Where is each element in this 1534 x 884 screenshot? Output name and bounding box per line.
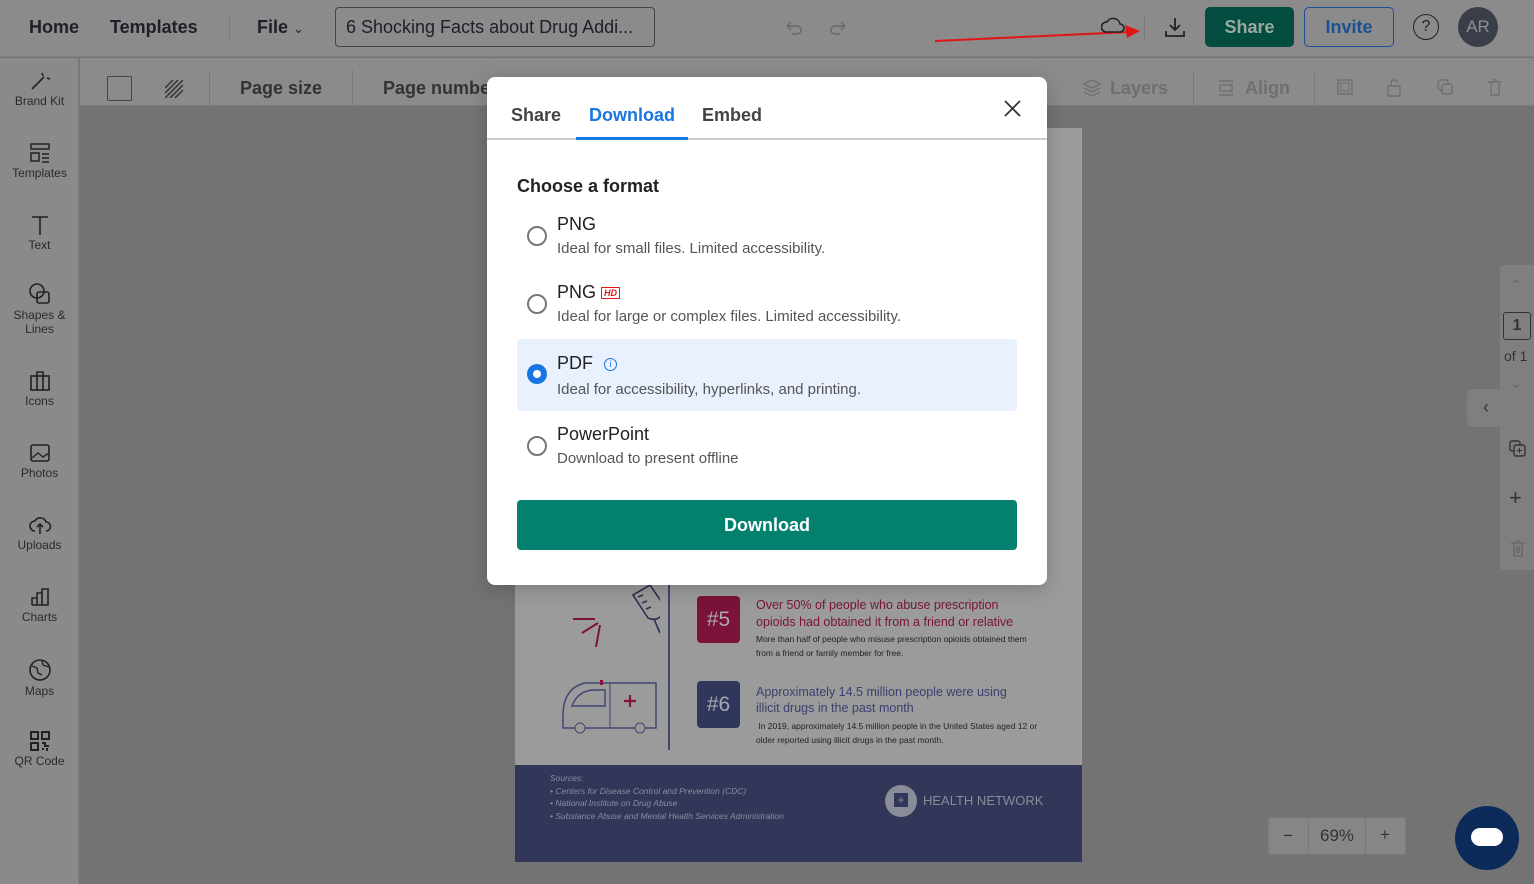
tabs: Embed: [702, 105, 762, 125]
share button: Share: [1224, 17, 1275, 37]
top bar: [0, 0, 1534, 57]
right page panel: of 1: [1504, 348, 1527, 364]
chat bubble: [1455, 806, 1519, 870]
toolbar: Layers: [1110, 78, 1168, 98]
collapse tab: ‹: [1483, 397, 1489, 417]
option: PowerPoint: Download to present offline: [557, 450, 739, 467]
fact #5: More than half of people who misuse prescription opioids obtained them from a friend or family member for free.: [756, 634, 1027, 658]
tabs: Share: [511, 105, 561, 125]
fact #5: #5: [707, 608, 730, 631]
toolbar: Align: [1245, 78, 1290, 98]
tabs: Download: [589, 105, 675, 125]
logo: health network: +: [897, 793, 904, 807]
fact #6: [697, 681, 1038, 745]
left sidebar: Charts: [22, 610, 57, 624]
option: PNG: [527, 214, 825, 257]
footer: sources: [515, 765, 1082, 862]
left sidebar: Templates: [12, 166, 67, 180]
option: PDF selected: Ideal for accessibility, hyperlinks, and printing.: [557, 381, 861, 398]
left sidebar: Icons: [25, 394, 54, 408]
left sidebar: QR Code: [14, 754, 65, 768]
invite button: Invite: [1325, 17, 1372, 37]
logo: health network: HEALTH NETWORK: [923, 793, 1043, 808]
right page panel: ⌃: [1510, 277, 1522, 293]
zoom control: [1268, 817, 1406, 855]
nav: Home: Home: [29, 17, 79, 37]
option: PNG HD: Ideal for large or complex files. Limited accessibility.: [557, 308, 901, 325]
timeline line: [668, 578, 670, 750]
fact #6: #6: [707, 693, 730, 716]
fact #5: Over 50% of people who abuse prescription opioids had obtained it from a friend or relative: [756, 598, 1013, 629]
option: PNG: Ideal for small files. Limited accessibility.: [557, 240, 825, 257]
right page panel: 1: [1513, 317, 1521, 334]
icon: ambulance: [562, 680, 657, 734]
option: PDF selected: i: [610, 359, 612, 369]
icon: help: [1413, 14, 1439, 40]
right page panel: ⌄: [1510, 375, 1522, 391]
tabs: [487, 77, 1047, 140]
left sidebar: Maps: [25, 684, 54, 698]
icon: cloud: [1101, 18, 1125, 33]
fact #5: [697, 596, 1027, 658]
option: PowerPoint: PowerPoint: [557, 424, 649, 444]
toolbar: [80, 58, 1534, 106]
left sidebar: Text: [28, 238, 50, 252]
left sidebar: Shapes &: [13, 308, 66, 322]
arrow annotation: [935, 25, 1140, 42]
share button: [1205, 7, 1294, 47]
toolbar right: layers, align: [1082, 79, 1102, 96]
left sidebar: [0, 58, 79, 884]
infographic page: [515, 128, 1082, 862]
avatar: [1458, 7, 1498, 47]
zoom control: +: [1380, 825, 1390, 844]
footer: sources: • National Institute on Drug Abuse: [550, 798, 677, 808]
footer: sources: Sources:: [550, 773, 584, 783]
footer: sources: • Centers for Disease Control and Prevention (CDC): [550, 786, 746, 796]
option: PNG HD: [527, 282, 901, 325]
fact #6: In 2019, approximately 14.5 million people in the United States aged 12 or older reported using illicit drugs in the past month.: [756, 721, 1037, 745]
option: PDF selected: [517, 339, 1017, 411]
icon: download: [1165, 18, 1185, 37]
invite button: [1304, 7, 1394, 47]
collapse tab: [1467, 389, 1505, 427]
right page panel: +: [1509, 485, 1522, 510]
option: PNG: PNG: [557, 214, 596, 234]
document title field: 6 Shocking Facts about Drug Addi...: [346, 17, 633, 37]
right page panel: [1500, 265, 1534, 570]
download button: Download: [724, 515, 810, 535]
option: PowerPoint: [527, 424, 739, 467]
left sidebar: Photos: [21, 466, 58, 480]
undo redo: [786, 22, 846, 35]
logo: health network: [885, 785, 1044, 817]
left sidebar: Uploads: [17, 538, 62, 552]
fact #6: Approximately 14.5 million people were using illicit drugs in the past month: [756, 685, 1007, 715]
avatar: AR: [1466, 17, 1490, 36]
download button: [517, 500, 1017, 550]
left sidebar: Lines: [25, 322, 54, 336]
option: PDF selected: PDF: [557, 353, 593, 373]
document title field: [335, 7, 655, 47]
toolbar: Page size: [240, 78, 322, 98]
footer: sources: • Substance Abuse and Mental Health Services Administration: [550, 810, 784, 820]
option: PNG HD: PNG: [557, 282, 596, 302]
zoom control: 69%: [1320, 826, 1354, 845]
zoom control: −: [1283, 826, 1293, 845]
toolbar: Page numbe: [383, 78, 490, 98]
icon: syringe: [573, 585, 660, 648]
left sidebar: Brand Kit: [15, 94, 64, 108]
nav: Templates: Templates: [110, 17, 198, 37]
icon: help: ?: [1422, 18, 1430, 35]
heading: Choose a format: [517, 176, 659, 196]
nav: File: File ⌄: [257, 17, 304, 37]
modal: download: [487, 77, 1047, 585]
option: PNG HD: HD: [604, 288, 617, 298]
